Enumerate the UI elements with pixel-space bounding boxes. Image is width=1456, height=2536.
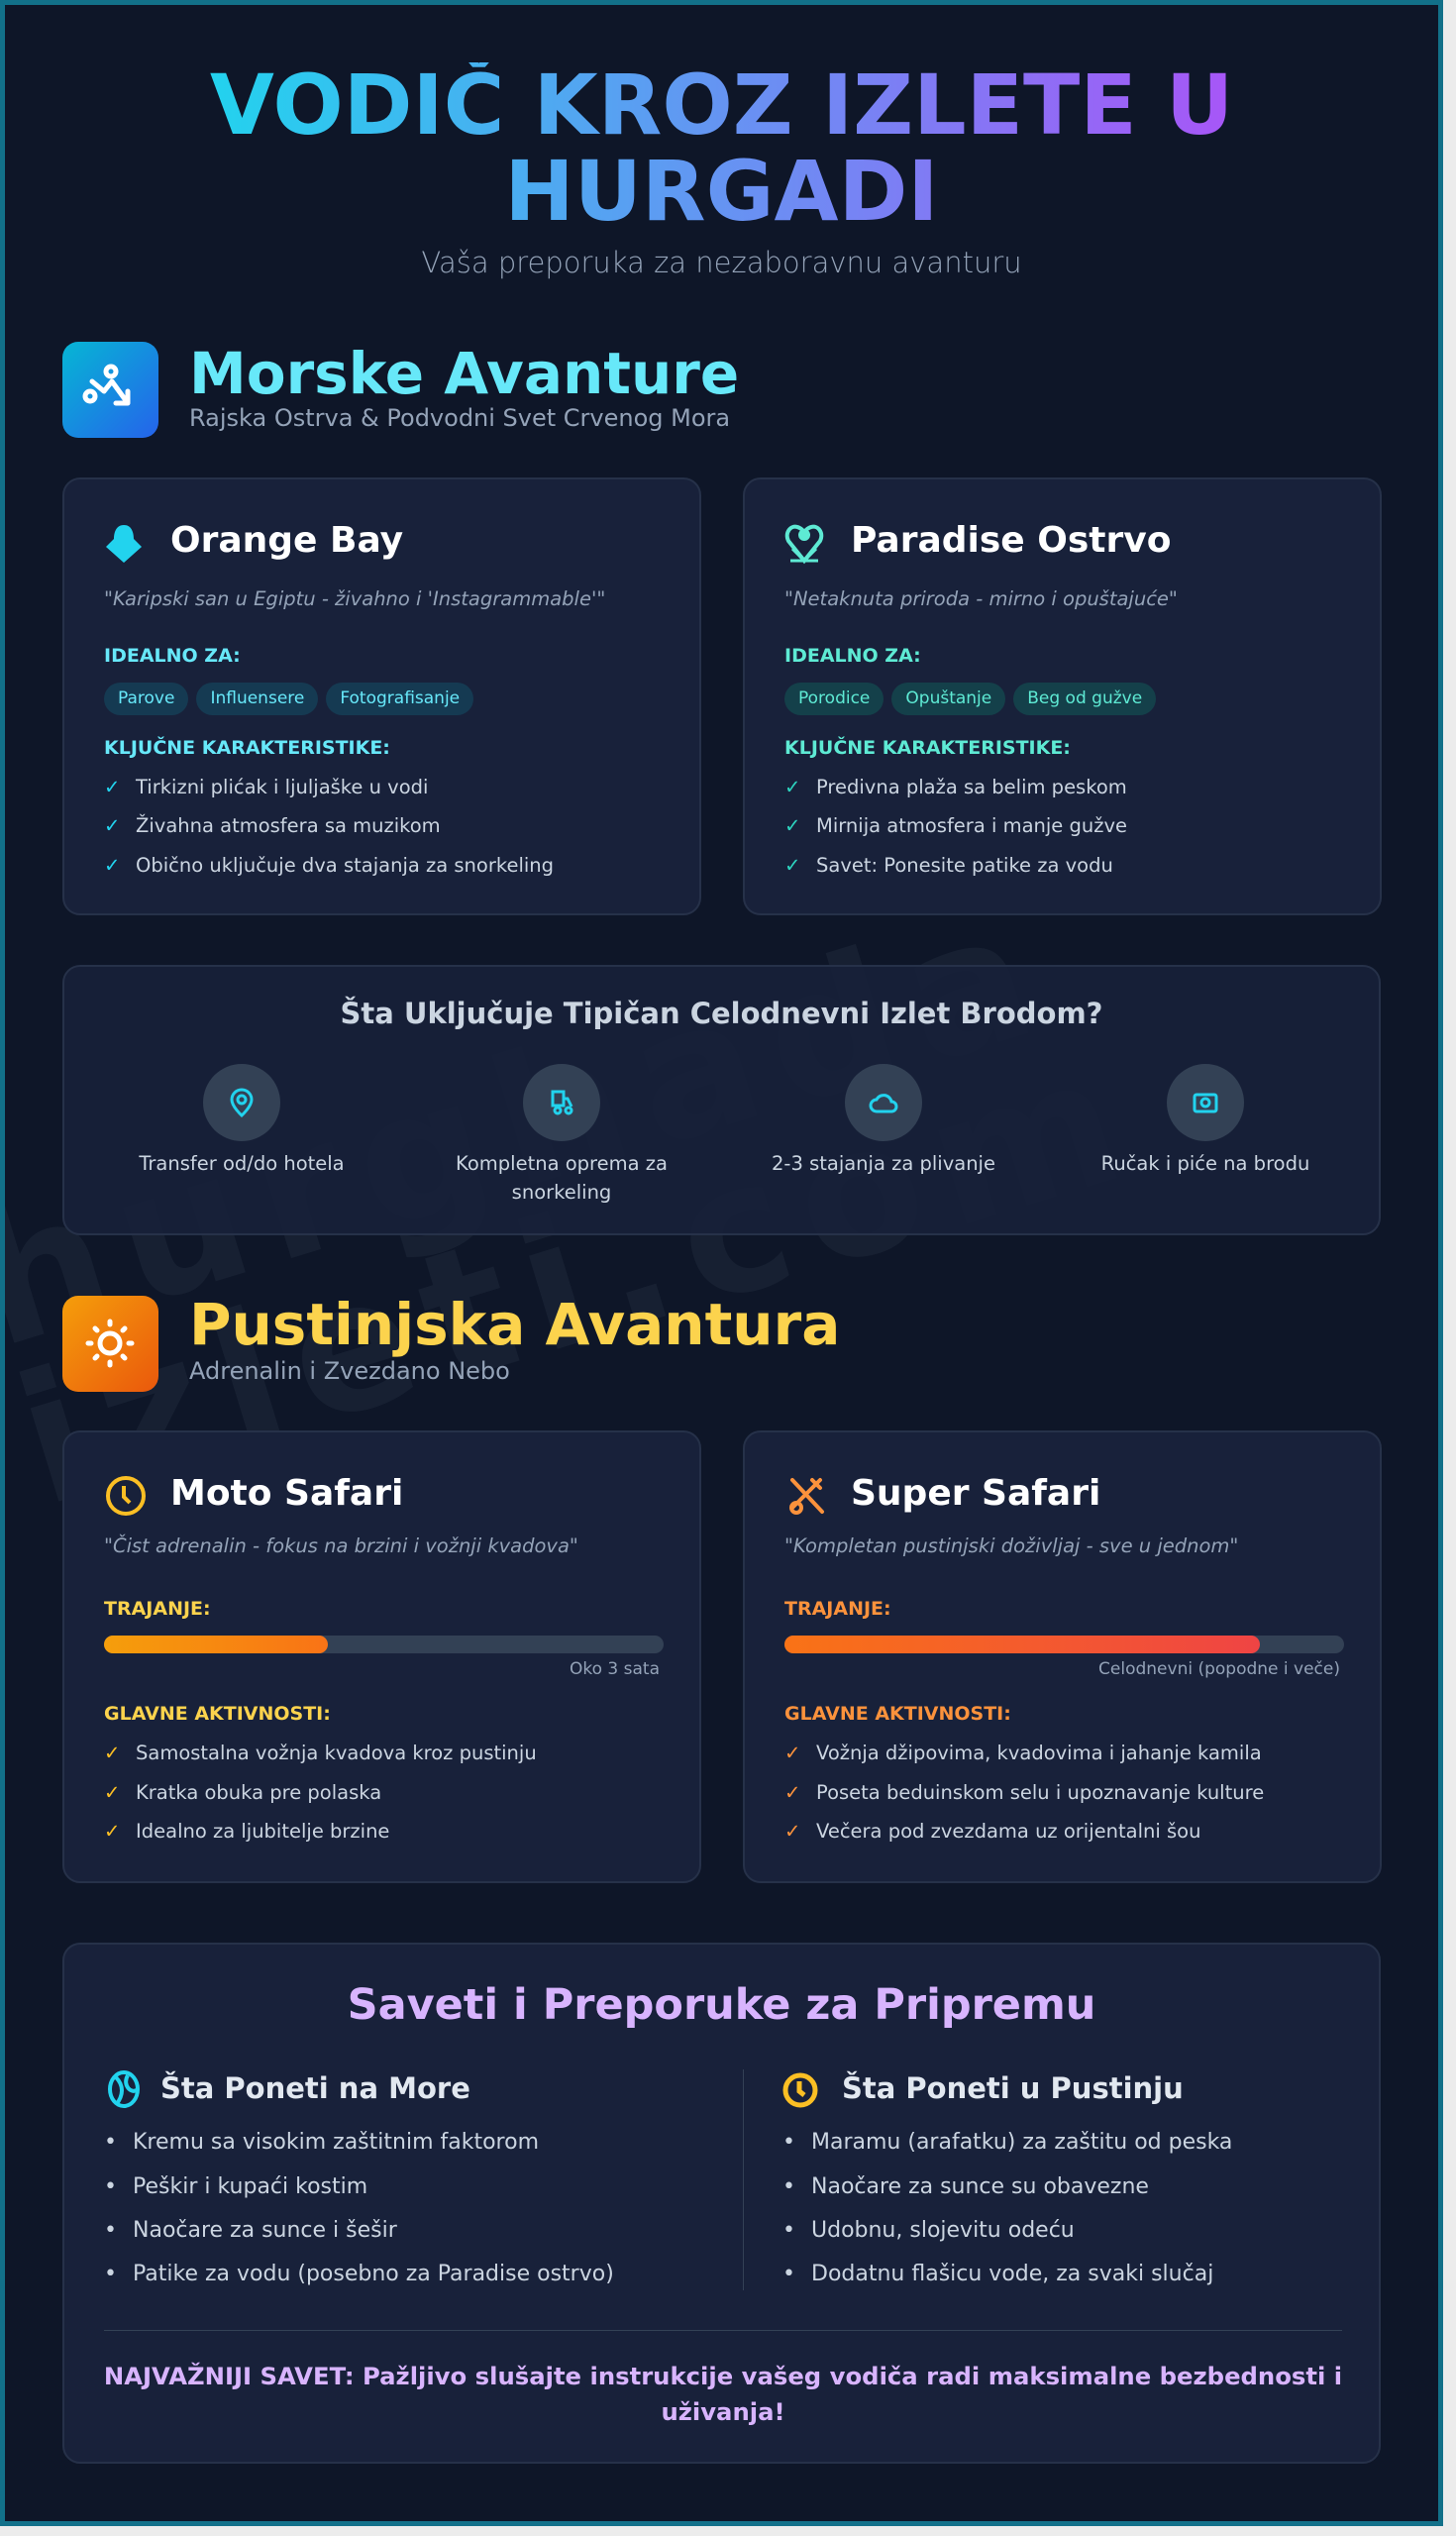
list: Vožnja džipovima, kvadovima i jahanje kamila [816, 1742, 1262, 1764]
duration bar [784, 1636, 1344, 1653]
icon: pin [203, 1064, 280, 1141]
quote: "Kompletan pustinjski doživljaj - sve u jednom" [784, 1534, 1238, 1557]
icon: clock [106, 1476, 146, 1516]
duration text: Oko 3 sata [570, 1659, 660, 1679]
icon: sun [62, 1296, 158, 1392]
tags: Porodice [798, 688, 870, 708]
item: swim stops [772, 1064, 995, 1175]
list: Tirkizni plićak i ljuljaške u vodi [136, 776, 428, 798]
icon: sea [62, 342, 158, 438]
panel: Moto Safari: ✓ [104, 1820, 120, 1843]
list: ✓ [104, 776, 120, 798]
panel: Super Safari: ✓ [784, 1781, 800, 1804]
panel: Moto Safari: Idealno za ljubitelje brzine [136, 1820, 389, 1843]
heading: Šta Uključuje Tipičan Celodnevni Izlet Brodom? [340, 997, 1103, 1030]
card title: Orange Bay [170, 520, 403, 561]
panel: tips: Naočare za sunce su obavezne [811, 2174, 1149, 2199]
item: swim stops: 2-3 stajanja za plivanje [772, 1152, 995, 1175]
card title: Super Safari [851, 1473, 1100, 1514]
duration text: Celodnevni (popodne i veče) [1098, 1659, 1340, 1679]
tags: Fotografisanje [340, 688, 460, 708]
panel: tips: Dodatnu flašicu vode, za svaki slučaj [811, 2262, 1213, 2286]
item: transfer: Transfer od/do hotela [139, 1152, 345, 1175]
list: Predivna plaža sa belim peskom [816, 776, 1127, 798]
card title: Moto Safari [170, 1473, 403, 1514]
label: GLAVNE AKTIVNOSTI: [104, 1703, 331, 1725]
panel: Moto Safari [62, 1430, 701, 1883]
item: snorkel gear [456, 1064, 668, 1204]
subheading: Šta Poneti u Pustinju [842, 2071, 1184, 2105]
panel: boat trip includes [62, 965, 1381, 1235]
icon: gear [523, 1064, 600, 1141]
watermark: izleti.com [0, 1011, 1160, 1546]
panel: Moto Safari: ✓ [104, 1781, 120, 1804]
icon: camera [1167, 1064, 1244, 1141]
label: KLJUČNE KARAKTERISTIKE: [784, 737, 1071, 759]
tags [104, 683, 473, 715]
icon: bell [106, 525, 142, 563]
panel: Orange Bay: Živahna atmosfera sa muzikom [136, 814, 441, 837]
panel: tips: • [104, 2218, 117, 2243]
tags: Opuštanje [905, 688, 991, 708]
panel: tips: Naočare za sunce i šešir [133, 2218, 397, 2243]
key tip: NAJVAŽNIJI SAVET: Pažljivo slušajte instrukcije vašeg vodiča radi maksimalne bezbednosti i uživanja! [104, 2362, 1342, 2426]
heading: Morske Avanture [189, 340, 739, 407]
panel: tips: • [782, 2174, 795, 2199]
subtitle: Vaša preporuka za nezaboravnu avanturu [421, 246, 1022, 279]
icon: sea ball [108, 2070, 140, 2108]
heading: Saveti i Preporuke za Pripremu [348, 1980, 1095, 2030]
tags: Influensere [210, 688, 304, 708]
list: ✓ [784, 1742, 800, 1764]
panel: tips: Patike za vodu (posebno za Paradise ostrvo) [133, 2262, 614, 2286]
section header: sea [62, 340, 739, 438]
panel: tips: • [782, 2218, 795, 2243]
panel: Paradise: ✓ [784, 814, 800, 837]
panel: Super Safari: ✓ [784, 1820, 800, 1843]
title: VODIČ KROZ IZLETE U HURGADI [210, 56, 1233, 240]
tags [784, 683, 1156, 715]
duration bar [104, 1636, 664, 1653]
icon: clock [782, 2072, 818, 2108]
panel: Orange Bay: ✓ [104, 854, 120, 877]
panel: Paradise: Savet: Ponesite patike za vodu [816, 854, 1113, 877]
panel: Orange Bay: ✓ [104, 814, 120, 837]
list: ✓ [104, 1742, 120, 1764]
label: KLJUČNE KARAKTERISTIKE: [104, 737, 390, 759]
panel: Paradise: Mirnija atmosfera i manje gužve [816, 814, 1127, 837]
label: TRAJANJE: [784, 1598, 891, 1620]
card title: Paradise Ostrvo [851, 520, 1171, 561]
list: Samostalna vožnja kvadova kroz pustinju [136, 1742, 537, 1764]
icon: tools [789, 1478, 824, 1515]
panel: Super Safari: Poseta beduinskom selu i upoznavanje kulture [816, 1781, 1264, 1804]
quote: "Čist adrenalin - fokus na brzini i vožnji kvadova" [104, 1534, 578, 1557]
panel: Orange Bay: Obično uključuje dva stajanja za snorkeling [136, 854, 554, 877]
panel: Paradise: ✓ [784, 854, 800, 877]
panel: Orange Bay [62, 477, 701, 915]
panel: Paradise [743, 477, 1382, 915]
tags: Parove [118, 688, 174, 708]
subheading: Šta Poneti na More [160, 2071, 470, 2105]
label: GLAVNE AKTIVNOSTI: [784, 1703, 1011, 1725]
panel: tips: • [104, 2262, 117, 2286]
heading: Pustinjska Avantura [189, 1291, 840, 1358]
panel: tips: Udobnu, slojevitu odeću [811, 2218, 1075, 2243]
item: lunch: Ručak i piće na brodu [1101, 1152, 1309, 1175]
label: IDEALNO ZA: [784, 645, 921, 667]
icon: heart [784, 525, 824, 565]
tags: Beg od gužve [1027, 688, 1142, 708]
icon: cloud [845, 1064, 922, 1141]
panel: tips: Peškir i kupaći kostim [133, 2174, 367, 2199]
item: snorkel gear: Kompletna oprema za snorkeling [456, 1152, 668, 1204]
panel: Super Safari: Večera pod zvezdama uz orijentalni šou [816, 1820, 1200, 1843]
section header: desert [62, 1291, 840, 1392]
panel: tips [62, 1943, 1381, 2464]
bullets: • [104, 2130, 117, 2155]
panel: Super Safari [743, 1430, 1382, 1883]
item: lunch [1101, 1064, 1309, 1175]
quote: "Netaknuta priroda - mirno i opuštajuće" [784, 587, 1178, 610]
item: transfer [139, 1064, 345, 1175]
list: ✓ [784, 776, 800, 798]
panel: Moto Safari: Kratka obuka pre polaska [136, 1781, 381, 1804]
quote: "Karipski san u Egiptu - živahno i 'Instagrammable'" [104, 587, 605, 610]
label: IDEALNO ZA: [104, 645, 241, 667]
bullets: Kremu sa visokim zaštitnim faktorom [133, 2130, 539, 2155]
panel: tips: • [782, 2262, 795, 2286]
subheading: Rajska Ostrva & Podvodni Svet Crvenog Mora [189, 404, 730, 432]
subheading: Adrenalin i Zvezdano Nebo [189, 1357, 510, 1385]
bullets: Maramu (arafatku) za zaštitu od peska [811, 2130, 1232, 2155]
bullets: • [782, 2130, 795, 2155]
label: TRAJANJE: [104, 1598, 211, 1620]
panel: tips: • [104, 2174, 117, 2199]
